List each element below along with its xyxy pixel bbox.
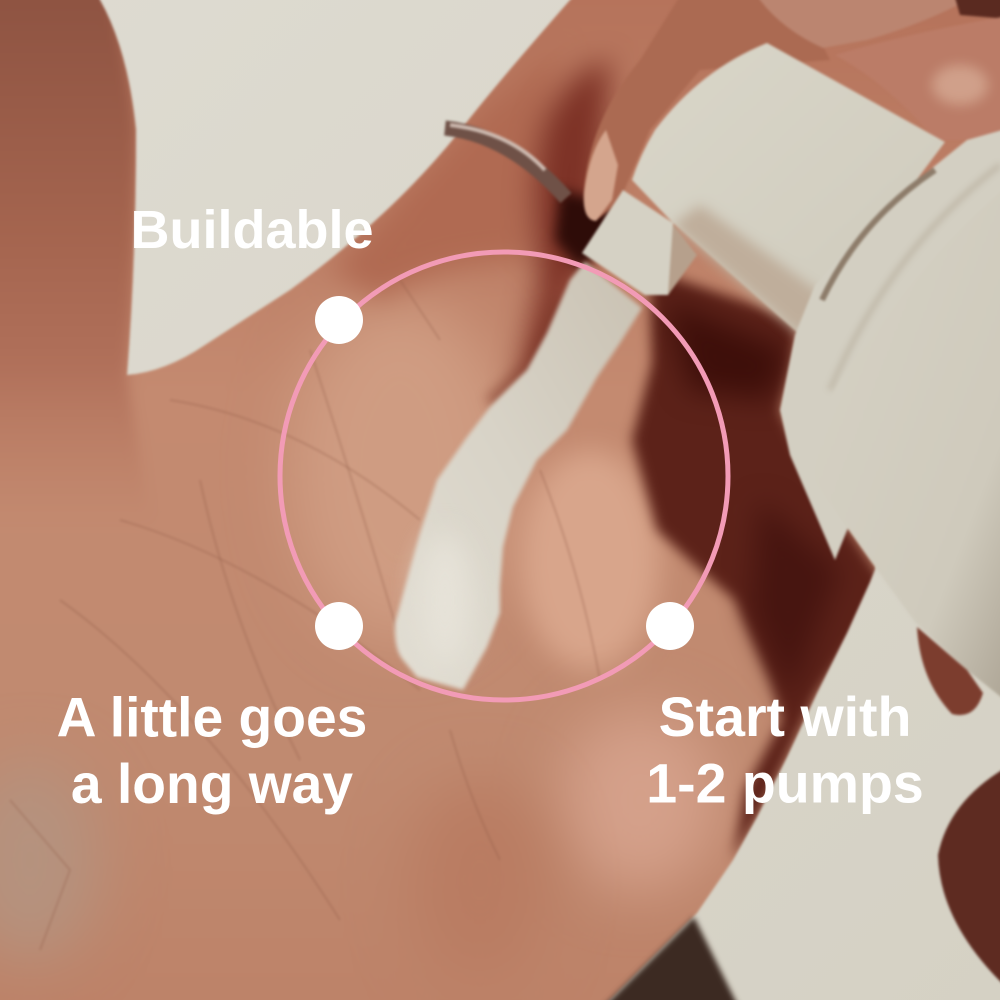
bottle body bbox=[812, 175, 1000, 712]
label: Start with 1-2 pumps: Start with bbox=[659, 686, 911, 748]
dark corner shadow bbox=[590, 917, 745, 1000]
wrinkled lower-left skin bbox=[0, 774, 99, 956]
finger with nail bbox=[584, 0, 830, 220]
pump cap bbox=[632, 43, 945, 335]
label: Start with 1-2 pumps: 1-2 pumps bbox=[646, 752, 924, 814]
nozzle shaded side bbox=[650, 225, 697, 295]
ring bbox=[445, 125, 566, 198]
lit palm patch bbox=[290, 300, 510, 640]
ring highlight bbox=[450, 125, 545, 170]
cream ribbon bbox=[395, 262, 642, 690]
finger under bottle bbox=[917, 627, 983, 715]
deep shadow under pump bbox=[555, 190, 620, 270]
darker centre of palm bbox=[432, 798, 540, 928]
dark corner bbox=[950, 0, 1000, 20]
body seam bbox=[830, 165, 1000, 390]
shadow core top bbox=[665, 300, 790, 400]
annotation circle bbox=[280, 252, 728, 700]
cream bbox=[395, 262, 642, 690]
label: Buildable: Buildable bbox=[130, 200, 374, 260]
nozzle top bbox=[582, 190, 673, 295]
fingers gripping the bottle bbox=[584, 0, 1000, 221]
ring band bbox=[445, 128, 566, 198]
label: A little goes a long way: a long way bbox=[71, 753, 353, 815]
finger highlight bbox=[932, 65, 988, 105]
dark shadow beneath bottle bbox=[632, 270, 890, 860]
bottle collar bbox=[780, 125, 1000, 560]
marker dot: Buildable bbox=[315, 296, 363, 344]
top thumb bbox=[750, 0, 978, 48]
lit palm patch right bbox=[520, 450, 660, 670]
cream highlight bbox=[419, 534, 471, 666]
cap lower shading bbox=[673, 205, 830, 335]
bottle and pump bbox=[582, 43, 1000, 715]
cream shadow edge bbox=[490, 300, 560, 403]
shadow between fingers bbox=[515, 60, 610, 395]
label: A little goes a long way: A little goes bbox=[57, 686, 367, 748]
fingernail bbox=[584, 130, 618, 221]
shadow core bottom bbox=[750, 500, 840, 700]
right fingers bbox=[835, 14, 1000, 140]
finger base shading bbox=[334, 74, 548, 306]
lower right finger bbox=[938, 760, 1000, 1000]
lit heel of the hand bbox=[560, 710, 720, 890]
marker dot: A little goes a long way bbox=[315, 602, 363, 650]
thumb bbox=[0, 0, 136, 460]
collar groove bbox=[822, 170, 935, 300]
marker dot: Start with 1-2 pumps bbox=[646, 602, 694, 650]
palm crease lines bbox=[10, 280, 600, 950]
